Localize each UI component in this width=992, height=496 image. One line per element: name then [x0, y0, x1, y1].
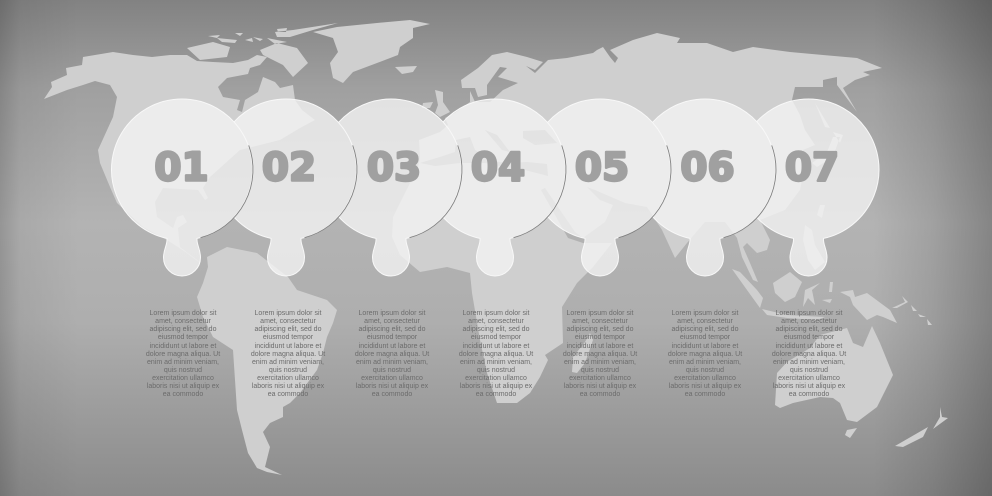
map: Iceland — [395, 66, 417, 74]
text block 04: adipiscing elit, sed do — [463, 326, 529, 333]
text block 03: quis nostrud — [373, 367, 411, 374]
map: South America — [197, 247, 337, 475]
text block 07: enim ad minim veniam, — [773, 359, 845, 366]
text block 05: Lorem ipsum dolor sit — [567, 310, 633, 317]
text block 03: eiusmod tempor — [367, 334, 417, 341]
text block 06: amet, consectetur — [677, 318, 733, 325]
text block 02: enim ad minim veniam, — [252, 359, 324, 366]
text block 06: Lorem ipsum dolor sit — [672, 310, 738, 317]
text block 07 — [772, 310, 846, 398]
text block 07: exercitation ullamco — [778, 375, 840, 382]
text block 06: adipiscing elit, sed do — [672, 326, 738, 333]
circle step 06 — [652, 98, 776, 276]
circle step 01: 01 — [154, 146, 209, 190]
map: North America — [44, 52, 315, 263]
text block 07: amet, consectetur — [781, 318, 837, 325]
text block 01: ea commodo — [163, 391, 203, 398]
text block 03: enim ad minim veniam, — [356, 359, 428, 366]
text block 07: ea commodo — [789, 391, 829, 398]
text block 01: incididunt ut labore et — [150, 342, 216, 350]
text block 05: quis nostrud — [581, 367, 619, 374]
text block 06: incididunt ut labore et — [672, 342, 738, 350]
text block 01: eiusmod tempor — [158, 334, 208, 341]
text block 01: laboris nisi ut aliquip ex — [147, 383, 219, 390]
text block 06 — [668, 310, 742, 398]
text block 05: dolore magna aliqua. Ut — [563, 351, 637, 358]
text block 03: incididunt ut labore et — [359, 342, 425, 350]
text block 07: adipiscing elit, sed do — [776, 326, 842, 333]
text block 01: adipiscing elit, sed do — [150, 326, 216, 333]
text block 04: Lorem ipsum dolor sit — [463, 310, 529, 317]
text block 07: laboris nisi ut aliquip ex — [773, 383, 845, 390]
text block 01: amet, consectetur — [155, 318, 211, 325]
text block 05: eiusmod tempor — [575, 334, 625, 341]
text block 06: eiusmod tempor — [680, 334, 730, 341]
text block 06: enim ad minim veniam, — [669, 359, 741, 366]
text block 02: amet, consectetur — [260, 318, 316, 325]
text block 07: quis nostrud — [790, 367, 828, 374]
map: Madagascar — [572, 333, 593, 373]
text block 02: laboris nisi ut aliquip ex — [252, 383, 324, 390]
text block 06: quis nostrud — [686, 367, 724, 374]
text block 02: exercitation ullamco — [257, 375, 319, 382]
text block 07: incididunt ut labore et — [776, 342, 842, 350]
text block 04 — [459, 310, 534, 398]
map: New Zealand — [895, 407, 948, 447]
circle step 06: 06 — [680, 146, 735, 190]
map: Pacific islands — [892, 296, 932, 325]
text block 02: ea commodo — [268, 391, 308, 398]
text block 04: dolore magna aliqua. Ut — [459, 351, 533, 358]
text block 06: laboris nisi ut aliquip ex — [669, 383, 741, 390]
text block 05: enim ad minim veniam, — [564, 359, 636, 366]
text block 05: ea commodo — [580, 391, 620, 398]
text block 07: Lorem ipsum dolor sit — [776, 310, 842, 317]
text block 03: Lorem ipsum dolor sit — [359, 310, 425, 317]
text block 01: enim ad minim veniam, — [147, 359, 219, 366]
text block 03: laboris nisi ut aliquip ex — [356, 383, 428, 390]
text block 03: dolore magna aliqua. Ut — [355, 351, 429, 358]
circle step 04: 04 — [471, 146, 525, 190]
circle step 02 — [234, 98, 358, 276]
text block 03: amet, consectetur — [364, 318, 420, 325]
map: British Isles — [422, 90, 450, 117]
text block 02: dolore magna aliqua. Ut — [251, 351, 325, 358]
map: Greenland — [313, 20, 430, 83]
text block 04: laboris nisi ut aliquip ex — [460, 383, 532, 390]
map: Tasmania — [845, 428, 857, 438]
text block 07: dolore magna aliqua. Ut — [772, 351, 846, 358]
text block 05: amet, consectetur — [572, 318, 628, 325]
text block 02 — [251, 310, 326, 398]
text block 01: dolore magna aliqua. Ut — [146, 351, 220, 358]
text block 01 — [146, 310, 220, 398]
circle step 01 — [111, 99, 253, 276]
circle step 05: 05 — [575, 146, 629, 190]
circle step 03 — [338, 98, 462, 276]
text block 06: exercitation ullamco — [674, 375, 736, 382]
text block 02: eiusmod tempor — [263, 334, 313, 341]
map: Indonesia — [732, 269, 833, 320]
text block 04: amet, consectetur — [468, 318, 524, 325]
map: Arctic islands — [187, 23, 338, 77]
text block 05: incididunt ut labore et — [567, 342, 633, 350]
text block 05: exercitation ullamco — [569, 375, 631, 382]
text block 02: Lorem ipsum dolor sit — [255, 310, 321, 317]
map: Eurasia and Africa — [392, 33, 882, 403]
text block 05 — [563, 310, 638, 398]
map: Taiwan and Philippines — [803, 205, 825, 270]
text block 05: laboris nisi ut aliquip ex — [564, 383, 636, 390]
text block 04: exercitation ullamco — [465, 375, 527, 382]
circle step 02: 02 — [262, 146, 316, 190]
circle step 04 — [443, 98, 566, 276]
text block 04: incididunt ut labore et — [463, 342, 529, 350]
text block 01: quis nostrud — [164, 367, 202, 374]
text block 06: ea commodo — [685, 391, 725, 398]
text block 06: dolore magna aliqua. Ut — [668, 351, 742, 358]
text block 02: incididunt ut labore et — [255, 342, 321, 350]
text block 01: exercitation ullamco — [152, 375, 214, 382]
text block 03: ea commodo — [372, 391, 412, 398]
text block 03: adipiscing elit, sed do — [359, 326, 425, 333]
circle step 03: 03 — [367, 146, 421, 190]
text block 03 — [355, 310, 430, 398]
text block 03: exercitation ullamco — [361, 375, 423, 382]
text block 04: eiusmod tempor — [471, 334, 521, 341]
text block 04: quis nostrud — [477, 367, 515, 374]
circle step 07 — [756, 98, 880, 276]
text block 07: eiusmod tempor — [784, 334, 834, 341]
text block 02: adipiscing elit, sed do — [255, 326, 321, 333]
circle step 07: 07 — [785, 146, 839, 190]
text block 04: enim ad minim veniam, — [460, 359, 532, 366]
text block 01: Lorem ipsum dolor sit — [150, 310, 216, 317]
text block 04: ea commodo — [476, 391, 516, 398]
map: New Guinea — [840, 290, 897, 323]
map: Australia — [775, 326, 893, 422]
circle step 05 — [548, 98, 672, 276]
text block 02: quis nostrud — [269, 367, 307, 374]
map: Japan and Sakhalin — [812, 103, 843, 167]
text block 05: adipiscing elit, sed do — [567, 326, 633, 333]
